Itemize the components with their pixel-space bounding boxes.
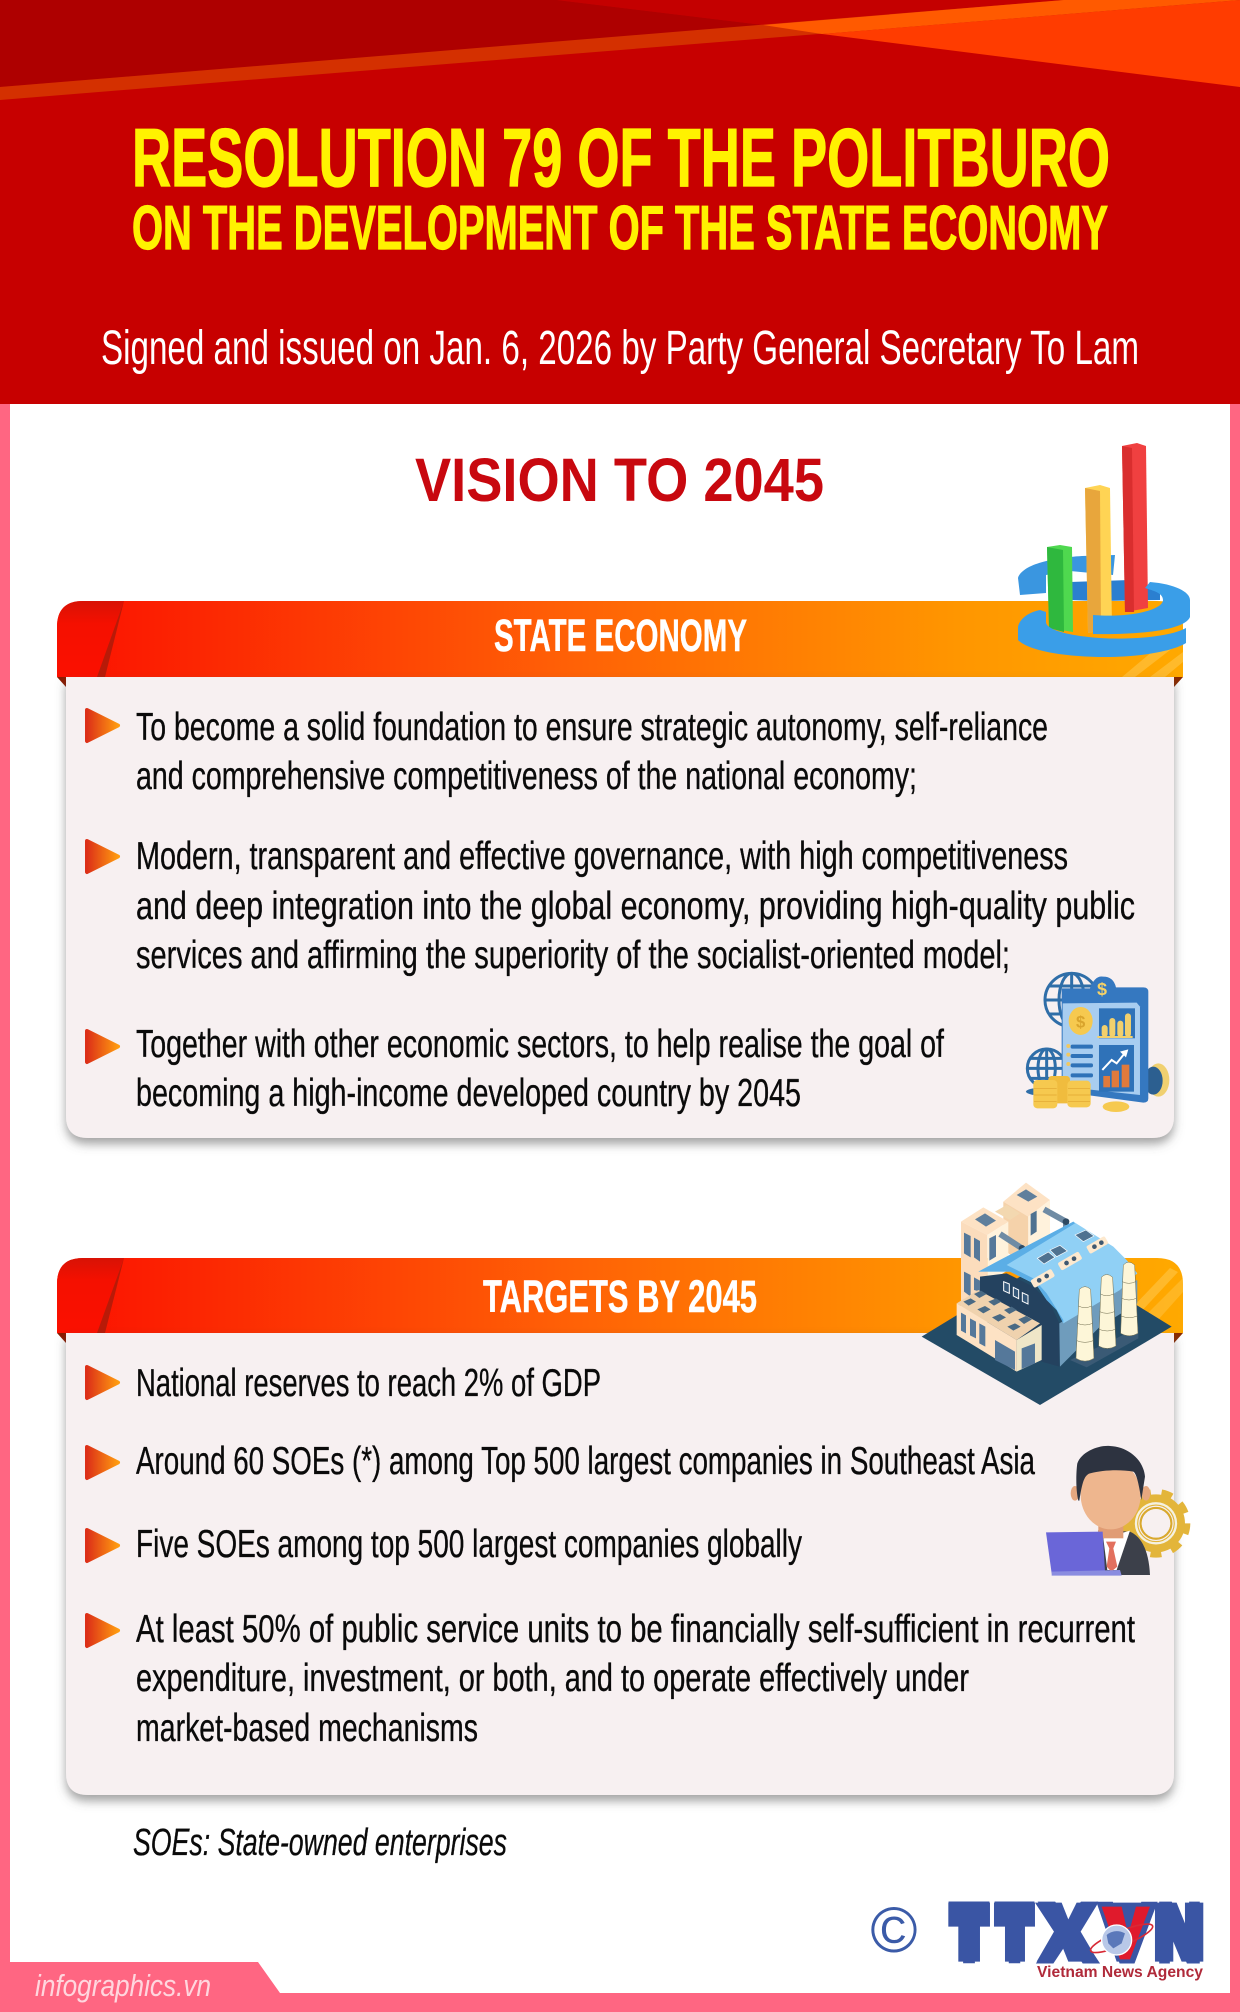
footer tab	[10, 1962, 280, 2003]
header banner	[0, 0, 1240, 404]
icon: factory	[922, 1183, 1172, 1405]
panel header band	[57, 1258, 1183, 1343]
icon: financial report: $	[1097, 979, 1107, 999]
gear behind	[1147, 1063, 1169, 1097]
heading: STATE ECONOMY	[494, 610, 747, 661]
bullet 1: and comprehensive competitiveness of the national economy;	[136, 755, 917, 798]
logo: TTXVN Vietnam News Agency: T	[995, 1886, 1034, 1981]
left tower	[961, 1207, 1008, 1235]
bullet 3	[87, 1023, 944, 1115]
back tower	[1003, 1183, 1050, 1217]
panel body	[66, 677, 1174, 1138]
bullet 3: Together with other economic sectors, to help realise the goal of	[136, 1023, 944, 1066]
roof details	[1030, 1269, 1055, 1288]
target 4: expenditure, investment, or both, and to operate effectively under	[136, 1657, 969, 1700]
icon: financial report	[1026, 973, 1169, 1112]
footnote: SOEs: State-owned enterprises	[133, 1822, 507, 1864]
logo: TTXVN Vietnam News Agency	[948, 1886, 1203, 1981]
bullet 1	[87, 706, 1048, 798]
hair	[1076, 1446, 1145, 1501]
chimneys	[1070, 1327, 1138, 1367]
globes	[1027, 973, 1098, 1088]
icon: 3D bar chart with rings	[1018, 443, 1190, 657]
report	[1062, 976, 1148, 1103]
laptop	[1046, 1532, 1105, 1573]
heading: TARGETS BY 2045	[483, 1271, 757, 1322]
panel header band	[57, 601, 1183, 687]
icon: businessman with gear	[1046, 1446, 1185, 1576]
target 1: National reserves to reach 2% of GDP	[136, 1362, 601, 1405]
target 4: market-based mechanisms	[136, 1707, 478, 1750]
panel body	[66, 1333, 1174, 1795]
head	[1071, 1486, 1079, 1501]
heading: vision: VISION TO 2045	[415, 446, 824, 514]
panel: state economy	[57, 601, 1183, 1138]
gear	[1127, 1494, 1185, 1553]
page border	[0, 404, 1240, 2012]
bullet 2	[87, 835, 1135, 977]
copyright mark: ©	[870, 1894, 918, 1966]
panel: targets	[57, 1258, 1183, 1795]
target 4	[87, 1608, 1135, 1750]
target 3: Five SOEs among top 500 largest companies globally	[136, 1523, 802, 1566]
bullet 3: becoming a high-income developed country by 2045	[136, 1072, 801, 1115]
logo: TTXVN Vietnam News Agency: T	[949, 1886, 989, 1981]
logo: TTXVN Vietnam News Agency: X	[1038, 1886, 1098, 1981]
hall walls and roof	[980, 1273, 1059, 1367]
site name: infographics.vn	[35, 1968, 211, 2003]
front annex	[957, 1290, 1040, 1340]
logo: TTXVN Vietnam News Agency: Vietnam News Agency	[1037, 1964, 1203, 1981]
logo: TTXVN Vietnam News Agency: V	[1098, 1886, 1156, 1981]
pipes	[1000, 1209, 1066, 1260]
target 3	[87, 1523, 802, 1566]
coins	[1033, 1076, 1129, 1112]
body	[1097, 1530, 1150, 1575]
target 1	[87, 1362, 601, 1405]
logo: TTXVN Vietnam News Agency: N	[1156, 1886, 1203, 1981]
icon: financial report: $	[1076, 1012, 1086, 1031]
